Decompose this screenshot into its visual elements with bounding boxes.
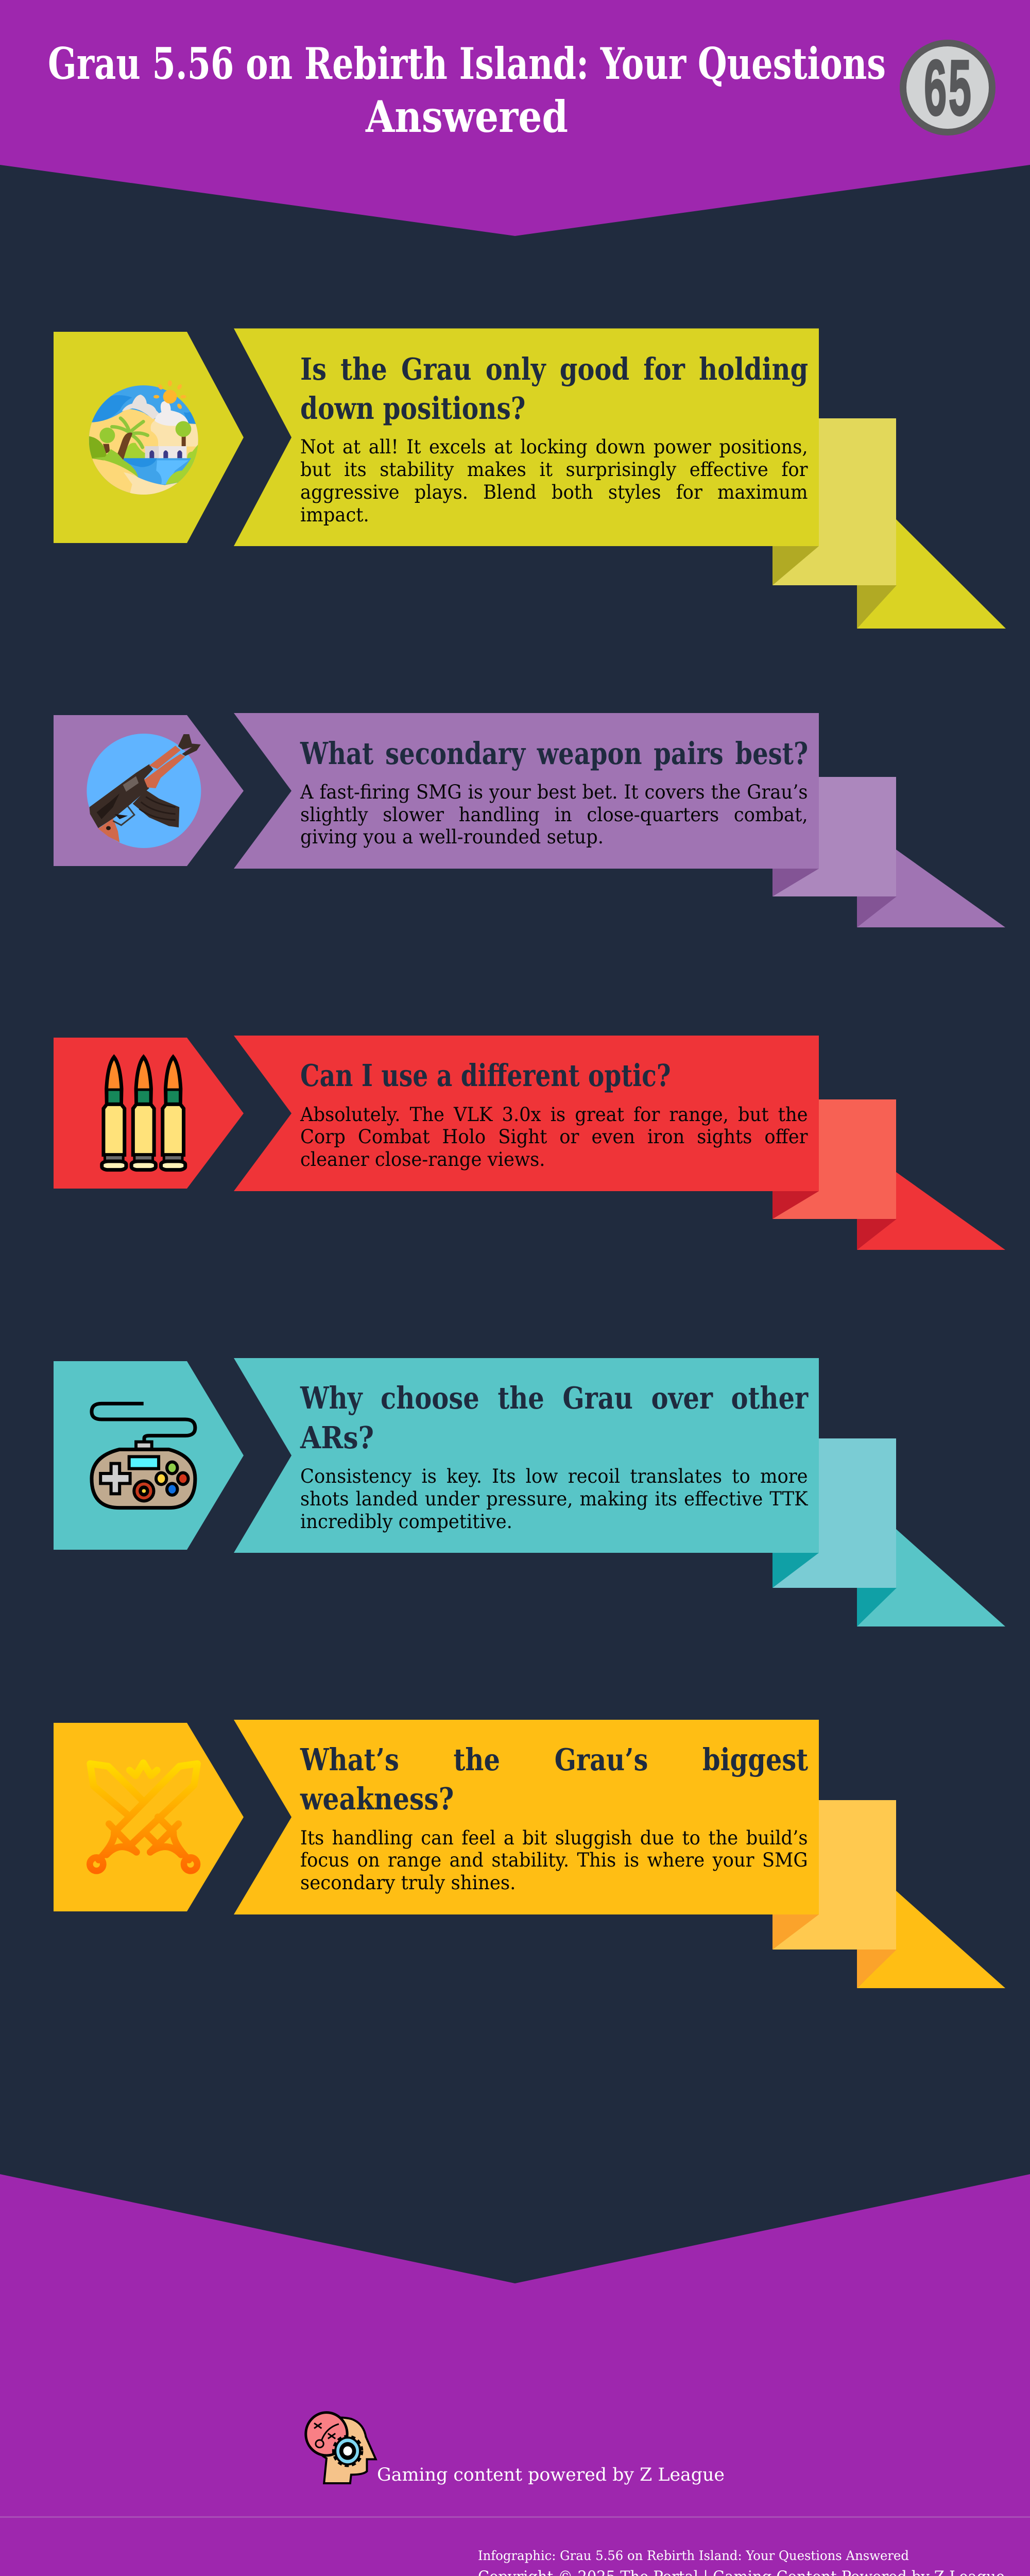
icon: crossed swords — [90, 1763, 197, 1871]
heading: What secondary weapon pairs best? — [300, 736, 808, 771]
main ribbon — [234, 713, 819, 869]
body text: focus on range and stability. This is where your SMG — [300, 1849, 808, 1871]
body text: incredibly competitive. — [300, 1511, 512, 1533]
body text: Absolutely. The VLK 3.0x is great for range, but the — [300, 1104, 808, 1126]
title: Answered — [365, 91, 568, 142]
body text: Consistency is key. Its low recoil translates to more — [300, 1465, 808, 1487]
icon: three bullets — [102, 1057, 185, 1170]
body text: but its stability makes it surprisingly effective for — [300, 459, 808, 481]
ribbon folds — [772, 1099, 1005, 1250]
body text — [300, 1465, 809, 1533]
icon: 65 badge — [900, 40, 995, 140]
ribbon folds — [772, 1800, 1005, 1988]
heading: Can I use a different optic? — [300, 1058, 671, 1093]
heading: weakness? — [300, 1781, 454, 1817]
heading: Is the Grau only good for holding — [300, 351, 808, 387]
main ribbon — [234, 1036, 819, 1191]
powered by text: Gaming content powered by Z League — [377, 2465, 725, 2485]
heading: What’s the Grau’s biggest — [300, 1742, 808, 1777]
main ribbon — [234, 1720, 819, 1914]
footer credits: Infographic: Grau 5.56 on Rebirth Island: Your Questions Answered — [478, 2548, 909, 2563]
ribbon folds — [772, 418, 1006, 629]
icon: head with strategy and gear — [306, 2413, 376, 2483]
footer credits — [478, 2548, 1005, 2576]
title — [48, 38, 886, 142]
heading — [300, 351, 808, 426]
chevron icon tile — [54, 715, 244, 866]
body text: cleaner close-range views. — [300, 1148, 545, 1171]
chevron icon tile — [54, 332, 244, 543]
ribbon folds — [772, 777, 1005, 927]
icon: game controller — [92, 1403, 195, 1508]
ribbon folds — [772, 1438, 1005, 1626]
chevron icon tile — [54, 1723, 244, 1911]
body text: Its handling can feel a bit sluggish due to the build’s — [300, 1827, 808, 1849]
body text: slightly slower handling in close-quarters combat, — [300, 804, 808, 826]
body text: impact. — [300, 504, 369, 526]
icon: island — [86, 380, 202, 498]
body text — [300, 781, 808, 848]
main ribbon — [234, 1358, 819, 1553]
panel: question 2 — [54, 713, 1005, 927]
panel: question 5 — [54, 1720, 1005, 1988]
icon: 65 badge: 65 — [923, 47, 972, 140]
panel: question 3 — [54, 1036, 1005, 1250]
body text — [300, 1827, 808, 1894]
header band — [0, 0, 1030, 236]
icon: assault rifle — [87, 734, 201, 848]
main ribbon — [234, 329, 819, 546]
body text — [300, 1104, 808, 1171]
heading: down positions? — [300, 391, 525, 426]
body text: A fast-firing SMG is your best bet. It covers the Grau’s — [300, 781, 808, 803]
chevron icon tile — [54, 1361, 244, 1550]
body text: Not at all! It excels at locking down power positions, — [300, 436, 808, 458]
heading: Why choose the Grau over other — [300, 1380, 808, 1416]
body text — [300, 436, 808, 526]
heading — [300, 1742, 808, 1817]
body text: Corp Combat Holo Sight or even iron sights offer — [300, 1126, 808, 1148]
heading — [300, 1380, 809, 1455]
body text: shots landed under pressure, making its effective TTK — [300, 1488, 808, 1510]
panel: question 1 — [54, 329, 1006, 629]
panel: question 4 — [54, 1358, 1005, 1626]
heading: ARs? — [300, 1420, 374, 1455]
body text: aggressive plays. Blend both styles for maximum — [300, 481, 808, 503]
body text: secondary truly shines. — [300, 1872, 516, 1894]
chevron icon tile — [54, 1038, 244, 1189]
body text: giving you a well-rounded setup. — [300, 826, 604, 848]
footer band — [0, 2174, 1030, 2576]
